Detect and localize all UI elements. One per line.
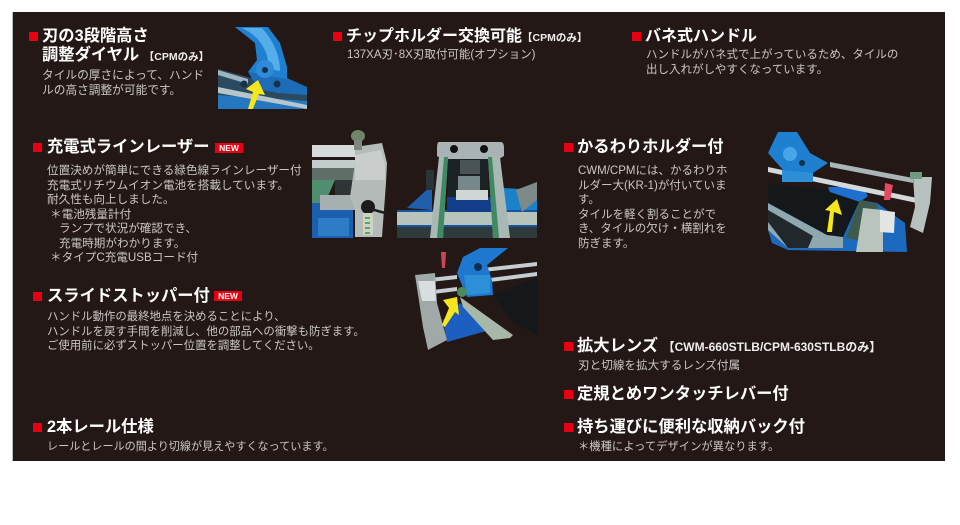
- feature: two rail: [33, 418, 334, 453]
- description: 出し入れがしやすくなっています。: [646, 64, 828, 76]
- description: ルの高さ調整が可能です。: [42, 84, 181, 96]
- description: す。: [578, 194, 600, 206]
- heading: バネ式ハンドル: [645, 28, 757, 45]
- feature: chip holder: [333, 27, 587, 61]
- photo: laser unit front: [397, 142, 537, 238]
- description: 刃と切線を拡大するレンズ付属: [578, 359, 740, 372]
- description: タイルを軽く割ることがで: [578, 208, 716, 220]
- photo: height dial: [218, 27, 307, 109]
- bullet: [33, 292, 42, 301]
- icon: yellow arrow: [246, 80, 265, 111]
- description: ＊電池残量計付: [50, 208, 131, 220]
- description: [646, 48, 898, 76]
- feature: rechargeable line laser: [33, 138, 302, 264]
- bullet: [632, 32, 641, 41]
- description: レールとレールの間より切線が見えやすくなっています。: [47, 441, 334, 453]
- description: ハンドル動作の最終地点を決めることにより、: [47, 311, 286, 323]
- description: ランプで状況が確認でき、: [59, 222, 197, 235]
- bullet: [29, 32, 38, 41]
- heading: [42, 26, 209, 64]
- heading: かるわりホルダー付: [577, 138, 724, 156]
- description: き、タイルの欠け・横割れを: [578, 223, 727, 235]
- description: ＊タイプC充電USBコード付: [50, 251, 198, 264]
- description: CWM/CPMには、かるわりホ: [578, 165, 728, 177]
- heading: チップホルダー交換可能【CPMのみ】: [346, 28, 587, 45]
- bullet: [33, 143, 42, 152]
- icon: yellow arrow: [442, 297, 459, 327]
- description: 137XA刃･8X刃取付可能(オプション): [347, 49, 536, 61]
- feature: storage bag: [564, 418, 805, 453]
- description: [47, 164, 302, 264]
- description: 充電式リチウムイオン電池を搭載しています。: [47, 178, 289, 192]
- heading: 定規とめワンタッチレバー付: [577, 385, 789, 403]
- bullet: [564, 423, 573, 432]
- description: 充電時期がわかります。: [59, 236, 185, 250]
- description: ルダー大(KR-1)が付いていま: [578, 180, 727, 192]
- feature: slide stopper: [33, 286, 365, 352]
- feature: spring handle: [632, 27, 898, 76]
- description: ご使用前に必ずストッパー位置を調整してください。: [47, 340, 320, 352]
- feature: magnifying lens: [564, 336, 881, 372]
- badge: new: NEW: [219, 143, 239, 153]
- description: 耐久性も向上しました。: [47, 193, 175, 206]
- feature: one-touch lever: [564, 384, 789, 403]
- heading: 拡大レンズ 【CWM-660STLB/CPM-630STLBのみ】: [577, 337, 881, 355]
- description: ハンドルがバネ式で上がっているため、タイルの: [646, 49, 898, 61]
- icon: yellow arrow: [825, 199, 842, 232]
- description: ＊機種によってデザインが異なります。: [578, 441, 779, 453]
- description: [47, 310, 365, 352]
- feature: lightweight breaker holder: [564, 138, 728, 250]
- bullet: [564, 143, 573, 152]
- bullet: [564, 390, 573, 399]
- heading: 刃の3段階高さ: [42, 27, 149, 45]
- heading: スライドストッパー付: [47, 287, 210, 305]
- photo: laser unit side: [312, 130, 387, 238]
- heading: 持ち運びに便利な収納バック付: [577, 418, 805, 436]
- bullet: [564, 342, 573, 351]
- heading: 調整ダイヤル 【CPMのみ】: [42, 46, 209, 64]
- heading: 充電式ラインレーザー: [47, 138, 210, 156]
- heading: 2本レール仕様: [47, 418, 154, 436]
- feature: blade height dial: [29, 26, 209, 96]
- bullet: [333, 32, 342, 41]
- photo: slide stopper: [415, 248, 537, 350]
- description: [578, 164, 728, 250]
- description: 防ぎます。: [578, 238, 634, 250]
- description: [42, 69, 204, 96]
- badge: new: NEW: [218, 291, 238, 301]
- description: ハンドルを戻す手間を削減し、他の部品への衝撃も防ぎます。: [47, 326, 365, 338]
- bullet: [33, 423, 42, 432]
- description: タイルの厚さによって、ハンド: [42, 69, 204, 82]
- description: 位置決めが簡単にできる緑色線ラインレーザー付: [47, 164, 302, 177]
- photo: breaker holder: [768, 132, 932, 252]
